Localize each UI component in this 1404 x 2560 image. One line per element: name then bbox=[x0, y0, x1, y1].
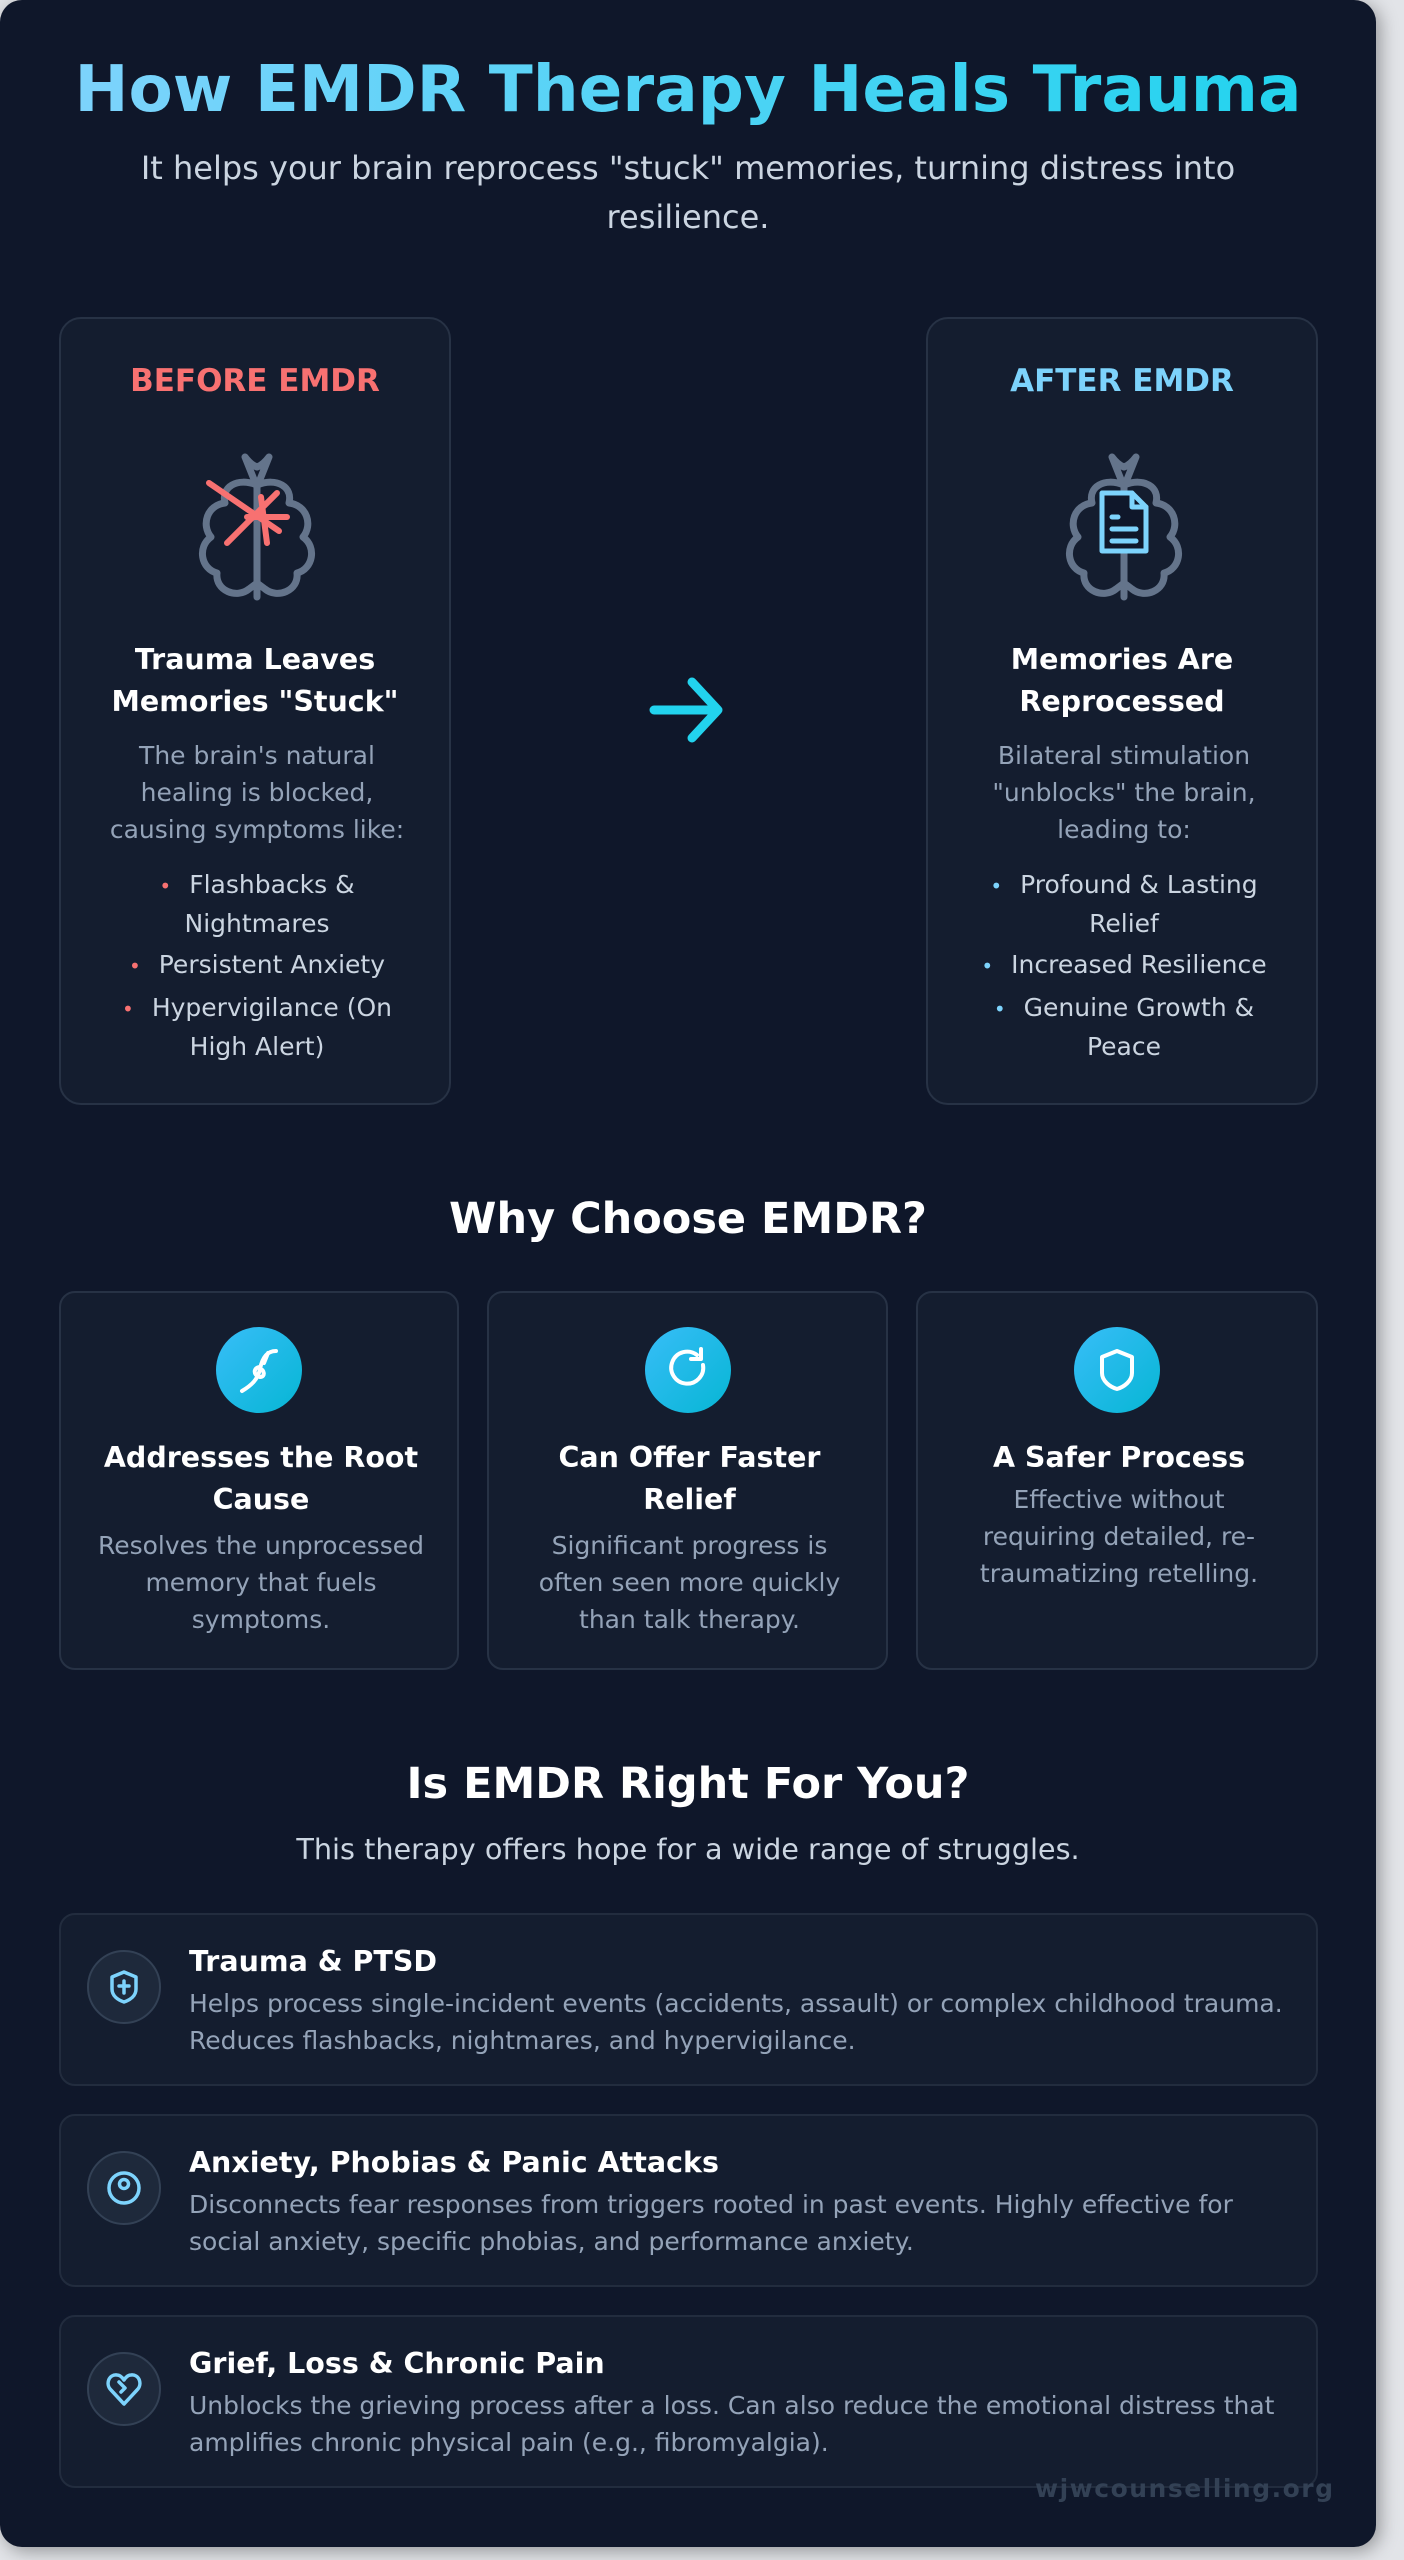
before heading: Memories "Stuck" bbox=[112, 685, 398, 718]
card title: Can Offer Faster Relief bbox=[558, 1441, 820, 1516]
before description: The brain's natural healing is blocked, causing symptoms like: bbox=[110, 741, 404, 844]
icon: heart bbox=[87, 2352, 161, 2426]
after benefits list: Peace bbox=[1087, 1032, 1161, 1061]
after benefits list: • Profound & Lasting bbox=[990, 870, 1258, 899]
after heading: Reprocessed bbox=[1019, 685, 1225, 718]
before symptom list: Nightmares bbox=[184, 909, 329, 938]
title: How EMDR Therapy Heals Trauma bbox=[74, 52, 1302, 127]
card: safer process bbox=[916, 1291, 1318, 1670]
icon: blocked brain bbox=[198, 454, 316, 600]
item title: Grief, Loss & Chronic Pain bbox=[189, 2347, 605, 2380]
before symptom list: • Flashbacks & bbox=[159, 870, 355, 899]
panel: before EMDR bbox=[59, 317, 451, 1105]
after heading: Memories Are bbox=[1011, 643, 1233, 676]
before heading: Trauma Leaves bbox=[135, 643, 375, 676]
card text: Significant progress is often seen more quickly than talk therapy. bbox=[539, 1531, 840, 1634]
after benefits list: Relief bbox=[1089, 909, 1159, 938]
subtitle: right for you: This therapy offers hope for a wide range of struggles. bbox=[296, 1832, 1080, 1866]
icon: refresh bbox=[644, 1327, 730, 1413]
arrow bbox=[650, 678, 722, 742]
after heading bbox=[1011, 643, 1233, 718]
card title: A Safer Process bbox=[993, 1441, 1245, 1474]
item title: Trauma & PTSD bbox=[189, 1945, 437, 1978]
before symptom list bbox=[122, 870, 392, 1061]
before heading bbox=[112, 643, 398, 718]
after description: Bilateral stimulation "unblocks" the brain, leading to: bbox=[992, 741, 1256, 844]
item text: Helps process single-incident events (accidents, assault) or complex childhood trauma. Reduces flashbacks, nightmares, and hypervigilance. bbox=[189, 1989, 1283, 2055]
after benefits list bbox=[981, 870, 1267, 1061]
heading: why choose: Why Choose EMDR? bbox=[449, 1194, 927, 1244]
card title: Addresses the Root Cause bbox=[104, 1441, 418, 1516]
card text: Effective without requiring detailed, re-traumatizing retelling. bbox=[980, 1485, 1258, 1588]
before label: BEFORE EMDR bbox=[130, 363, 380, 399]
item text: Unblocks the grieving process after a loss. Can also reduce the emotional distress that amplifies chronic physical pain (e.g., fibromyalgia). bbox=[189, 2391, 1274, 2457]
list item: anxiety bbox=[59, 2114, 1318, 2287]
before symptom list: • Hypervigilance (On bbox=[122, 993, 392, 1022]
card: root cause bbox=[59, 1291, 459, 1670]
icon: shield bbox=[1074, 1327, 1160, 1413]
after benefits list: • Genuine Growth & bbox=[994, 993, 1254, 1022]
card text: Resolves the unprocessed memory that fuels symptoms. bbox=[98, 1531, 424, 1634]
panel: after EMDR bbox=[926, 317, 1318, 1105]
list item: trauma bbox=[59, 1913, 1318, 2086]
after benefits list: • Increased Resilience bbox=[981, 950, 1267, 979]
item title: Anxiety, Phobias & Panic Attacks bbox=[189, 2146, 719, 2179]
watermark: wjwcounselling.org bbox=[1035, 2474, 1334, 2503]
icon: root bbox=[216, 1327, 302, 1413]
subtitle: It helps your brain reprocess "stuck" memories, turning distress into resilience. bbox=[141, 149, 1235, 236]
list item: grief bbox=[59, 2315, 1318, 2488]
card: faster relief bbox=[487, 1291, 888, 1670]
before symptom list: High Alert) bbox=[190, 1032, 324, 1061]
heading: right for you: Is EMDR Right For You? bbox=[407, 1759, 969, 1809]
icon: brain with document bbox=[1066, 454, 1182, 600]
item text: Disconnects fear responses from triggers rooted in past events. Highly effective for social anxiety, specific phobias, and performance anxiety. bbox=[189, 2190, 1233, 2256]
after label: AFTER EMDR bbox=[1010, 363, 1234, 399]
before symptom list: • Persistent Anxiety bbox=[129, 950, 385, 979]
icon: shield plus bbox=[87, 1950, 161, 2024]
icon: target bbox=[87, 2151, 161, 2225]
